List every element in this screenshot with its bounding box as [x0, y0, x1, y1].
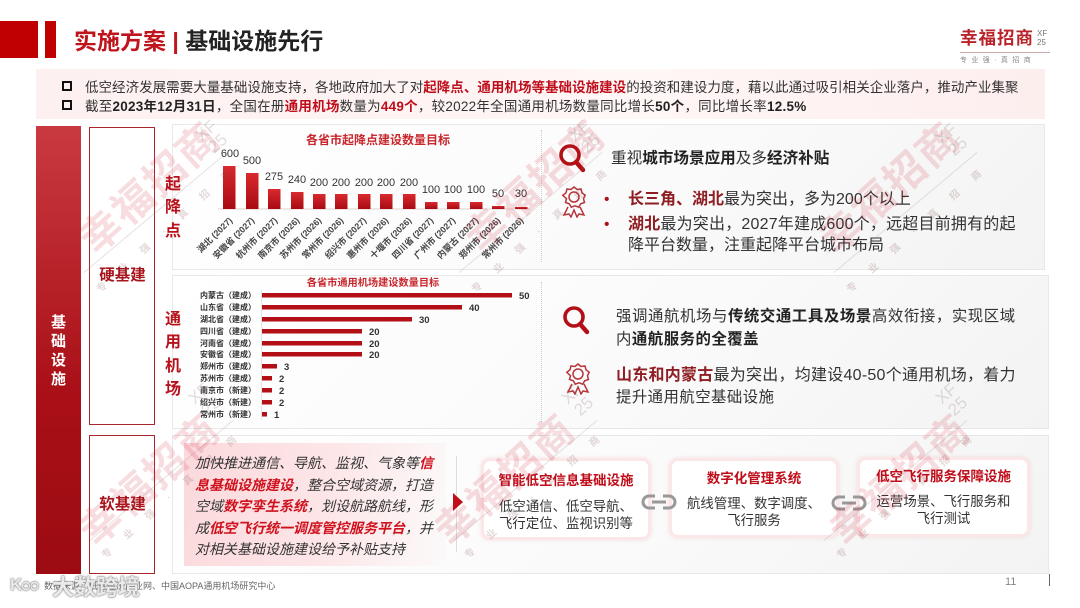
bar chart: general airport targets: [200, 276, 530, 421]
source note: 数据来源：低空经济产业网、中国AOPA通用机场研究中心: [44, 581, 275, 591]
bar chart: general airport targets: 30: [419, 315, 430, 326]
bar chart: vertiport targets: 100: [422, 184, 440, 196]
watermark rule: lower left: [90, 420, 233, 541]
card: flight service support: [857, 457, 1030, 537]
bar chart: general airport targets: 40: [469, 303, 480, 314]
logo: 25: [1037, 38, 1046, 47]
bar chart: vertiport targets: 30: [515, 188, 527, 200]
card: intelligent info infrastructure: 飞行定位、监视识别等: [499, 516, 633, 531]
airport headline: 强调通航机场与传统交通工具及场景高效衔接，实现区域: [616, 308, 1016, 325]
card: intelligent info infrastructure: 智能低空信息基础设施: [498, 473, 634, 488]
bar chart: vertiport targets: 600: [221, 148, 239, 160]
watermark mark: lower left: [185, 379, 224, 420]
card: flight service support: 低空飞行服务保障设施: [876, 469, 1011, 484]
watermark: upper centre: 幸福招商: [456, 111, 614, 261]
bar chart: vertiport targets: 湖北 (2027): [194, 215, 234, 255]
bar chart: vertiport targets: 郑州市 (2026): [456, 215, 502, 261]
soft infrastructure description: 空域数字孪生系统，划设航路航线，形: [195, 498, 433, 514]
watermark tagline: lower left: 专业强·真招商: [100, 422, 253, 561]
watermark mark: upper centre: XF: [565, 116, 594, 145]
watermark mark: lower right: XF: [932, 379, 961, 408]
watermark tagline: upper right: 专业强·真招商: [845, 156, 998, 295]
bar chart: vertiport targets: 200: [332, 177, 350, 189]
label: vertiports: 点: [165, 223, 181, 240]
soft infrastructure box: [89, 435, 155, 574]
logo: XF: [1037, 29, 1047, 38]
bar chart: vertiport targets: 各省市起降点建设数量目标: [306, 132, 450, 147]
watermark tagline: upper left: 专业强·真招商: [95, 156, 248, 295]
left category bar: 设: [51, 352, 66, 369]
bar chart: general airport targets: 四川省（建成）: [200, 326, 256, 336]
bar chart: general airport targets: 内蒙古（建成）: [200, 290, 256, 300]
bar chart: vertiport targets: 常州市 (2026): [479, 215, 525, 261]
bar chart: vertiport targets: 惠州市 (2026): [344, 215, 390, 261]
watermark tagline: upper centre: 专业强·真招商: [470, 156, 623, 295]
bar chart: vertiport targets: 200: [400, 177, 418, 189]
watermark rule: upper centre: [459, 152, 602, 273]
bar chart: vertiport targets: 广州市 (2027): [411, 215, 457, 261]
airport highlights: [616, 366, 1016, 406]
bullet line 2: 截至2023年12月31日，全国在册通用机场数量为449个，较2022年全国通用机场数量同比增长50个，同比增长率12.5%: [85, 99, 806, 114]
watermark: lower centre: 幸福招商: [426, 405, 584, 555]
watermark rule: upper left: [84, 152, 227, 273]
divider upper: [541, 130, 542, 262]
left category bar: [36, 126, 81, 574]
logo: 幸福招商: [960, 28, 1034, 48]
bar chart: general airport targets: 郑州市（建成）: [200, 361, 256, 371]
bar chart: general airport targets: 1: [274, 410, 280, 421]
bar chart: general airport targets: 20: [369, 350, 380, 361]
bar chart: general airport targets: 20: [369, 327, 380, 338]
bar chart: vertiport targets: 常州市 (2026): [299, 215, 345, 261]
bar chart: vertiport targets: 苏州市 (2026): [277, 215, 323, 261]
icon: ribbon 2: [566, 363, 590, 395]
watermark rule: lower centre: [454, 420, 597, 541]
bar chart: vertiport targets: 内蒙古 (2027): [434, 215, 480, 261]
bar chart: vertiport targets: 绍兴市 (2027): [322, 215, 368, 261]
label: vertiports: [165, 175, 181, 240]
page number rule: [1049, 574, 1050, 586]
icon: ribbon 1: [562, 186, 586, 218]
soft infrastructure description: 息基础设施建设，整合空域资源，打造: [195, 476, 433, 492]
bar chart: vertiport targets: 200: [377, 177, 395, 189]
watermark mark: upper right: XF: [932, 119, 961, 148]
bar chart: general airport targets: 20: [369, 339, 380, 350]
vertiport bullets: 湖北最为突出，2027年建成600个，远超目前拥有的起: [628, 216, 1016, 233]
watermark mark: lower right: [932, 379, 971, 420]
card: digital management: [669, 458, 839, 538]
bar chart: general airport targets: 安徽省（建成）: [200, 349, 256, 359]
bar chart: vertiport targets: 安徽省 (2027): [210, 215, 256, 261]
soft infrastructure description: [184, 443, 446, 566]
watermark mark: lower centre: 25: [570, 393, 597, 420]
card: flight service support: 飞行测试: [917, 511, 970, 526]
watermark mark: lower centre: XF: [558, 379, 587, 408]
vertiport bullets: 降平台数量，注重起降平台城市布局: [628, 237, 884, 254]
bar chart: general airport targets: 2: [279, 398, 284, 409]
bar chart: general airport targets: 各省市通用机场建设数量目标: [307, 276, 439, 289]
title: 实施方案 | 基础设施先行: [74, 28, 323, 54]
icon: link 2: [832, 496, 866, 510]
intro bullets panel: [36, 69, 1045, 119]
label: general airports: 通: [165, 311, 181, 328]
label: vertiports: 降: [165, 199, 181, 216]
bar chart: general airport targets: 湖北省（建成）: [200, 314, 256, 324]
watermark: lower right: 幸福招商: [821, 405, 979, 555]
watermark mark: lower left: XF: [185, 379, 214, 408]
bar chart: general airport targets: 南京市（新建）: [200, 385, 256, 395]
airport headline: 内通航服务的全覆盖: [616, 331, 759, 348]
watermark tagline: lower right: 专业强·真招商: [835, 422, 988, 561]
bar chart: general airport targets: 3: [284, 362, 289, 373]
label: general airports: 用: [165, 334, 181, 351]
icon: link 1: [642, 494, 676, 510]
card: digital management: 数字化管理系统: [707, 471, 801, 486]
panel: vertiports: [172, 124, 1045, 270]
watermark mark: upper left: 25: [204, 130, 231, 157]
bar chart: general airport targets: 50: [519, 291, 530, 302]
card: digital management: 航线管理、数字调度、: [687, 496, 821, 511]
watermark mark: upper right: [932, 119, 971, 160]
bar chart: vertiport targets: 南京市 (2026): [255, 215, 301, 261]
bar chart: general airport targets: 山东省（建成）: [200, 302, 256, 312]
bar chart: vertiport targets: 杭州市 (2027): [233, 215, 279, 261]
bar chart: vertiport targets: 200: [355, 177, 373, 189]
vertiport bullets: 长三角、湖北最为突出，多为200个以上: [628, 191, 911, 208]
divider middle: [541, 282, 542, 422]
panel: soft infrastructure: [172, 435, 1049, 574]
left category bar: 础: [51, 333, 66, 350]
watermark mark: lower right: 25: [944, 393, 971, 420]
card: intelligent info infrastructure: 低空通信、低空导航、: [499, 499, 633, 514]
watermark: lower left: 幸福招商: [71, 405, 229, 555]
watermark mark: upper centre: [565, 116, 604, 157]
vertiport bullets: •: [604, 216, 609, 233]
airport highlights: 提升通用航空基础设施: [616, 389, 774, 406]
page number: 11: [1005, 576, 1016, 588]
icon: magnifier 1: [559, 144, 586, 172]
label: general airports: 场: [165, 381, 181, 398]
watermark mark: upper centre: 25: [577, 130, 604, 157]
icon: magnifier 2: [563, 306, 590, 334]
soft infrastructure description: 成低空飞行统一调度管控服务平台，并: [195, 520, 433, 536]
card: digital management: 飞行服务: [727, 513, 781, 528]
watermark mark: upper left: [192, 116, 231, 157]
bar chart: vertiport targets: 500: [243, 155, 261, 167]
watermark mark: lower left: 25: [197, 393, 224, 420]
label: general airports: 机: [165, 358, 181, 375]
watermark mark: upper left: XF: [192, 116, 221, 145]
overlay brand mark: [10, 574, 140, 600]
bar chart: vertiport targets: 275: [265, 171, 283, 183]
card: intelligent info infrastructure: [481, 458, 651, 540]
watermark mark: lower centre: [558, 379, 597, 420]
overlay brand mark: 大数跨境: [52, 575, 140, 600]
bar chart: general airport targets: 2: [279, 386, 284, 397]
bar chart: general airport targets: 苏州市（建成）: [200, 373, 256, 383]
header accent blocks: [0, 21, 56, 58]
watermark: upper right: 幸福招商: [811, 113, 969, 263]
soft infrastructure description: 对相关基础设施建设给予补贴支持: [195, 541, 405, 557]
soft infrastructure description: 加快推进通信、导航、监视、气象等信: [195, 455, 433, 471]
overlay brand mark: K೦೦: [10, 575, 38, 594]
vertiport bullets: [604, 190, 1016, 254]
bar chart: general airport targets: 2: [279, 374, 284, 385]
left category bar: 施: [51, 371, 66, 388]
label: vertiports: 起: [165, 176, 181, 193]
panel: general airports: [172, 275, 1049, 429]
hard infrastructure box: [89, 127, 155, 425]
watermark rule: upper right: [834, 152, 977, 273]
bar chart: vertiport targets: 100: [467, 184, 485, 196]
airport highlights: 山东和内蒙古最为突出，均建设40-50个通用机场，着力: [616, 367, 1016, 384]
card: flight service support: 运营场景、飞行服务和: [877, 494, 1010, 509]
bar chart: vertiport targets: 四川省 (2027): [389, 215, 435, 261]
bar chart: vertiport targets: 240: [288, 174, 306, 186]
bar chart: vertiport targets: 50: [492, 188, 504, 200]
logo: [960, 28, 1050, 64]
watermark mark: upper right: 25: [944, 133, 971, 160]
bullet line 1: 低空经济发展需要大量基础设施支持，各地政府加大了对起降点、通用机场等基础设施建设的投资和建设力度，藉以此通过吸引相关企业落户，推动产业集聚: [85, 80, 1019, 95]
soft infrastructure box: 软基建: [99, 496, 146, 513]
bar chart: general airport targets: 常州市（新建）: [200, 409, 256, 419]
bar chart: vertiport targets: 200: [310, 177, 328, 189]
vertiport headline: 重视城市场景应用及多经济补贴: [611, 150, 829, 167]
watermark rule: lower right: [824, 420, 967, 541]
bar chart: vertiport targets: 十堰市 (2026): [367, 215, 413, 261]
logo: 专业强·真招商: [960, 57, 1035, 64]
airport headline: [616, 308, 1016, 348]
bar chart: vertiport targets: 100: [444, 184, 462, 196]
bar chart: general airport targets: 绍兴市（新建）: [200, 397, 256, 407]
divider with arrow: [453, 456, 463, 552]
watermark tagline: lower centre: 专业强·真招商: [463, 422, 616, 561]
left category bar: 基: [51, 314, 66, 331]
hard infrastructure box: 硬基建: [99, 267, 146, 284]
bar chart: general airport targets: 河南省（建成）: [200, 338, 256, 348]
vertiport bullets: •: [604, 191, 609, 208]
label: general airports: [165, 310, 181, 398]
watermark: upper left: 幸福招商: [71, 113, 229, 263]
bar chart: vertiport targets: [194, 132, 530, 261]
